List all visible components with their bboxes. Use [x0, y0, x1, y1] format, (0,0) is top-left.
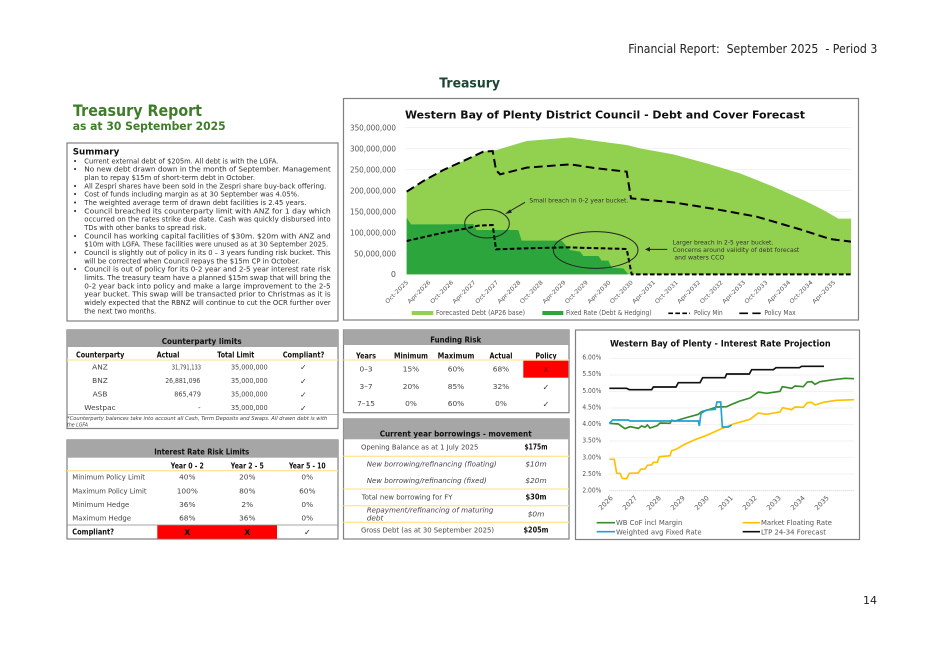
y axis gridlines and labels: 0	[391, 270, 396, 279]
page number: 14	[863, 594, 877, 607]
rows: New borrowing/refinancing (fixed)	[367, 476, 487, 485]
y axis gridlines and labels: 4.50%	[582, 403, 601, 411]
table title: Counterparty limits	[162, 337, 242, 346]
rows: Gross Debt (as at 30 September 2025)	[361, 526, 494, 535]
rows: 3–7	[359, 382, 373, 391]
summary bullet list: •	[73, 182, 77, 190]
summary bullet list: •	[73, 199, 77, 207]
panel: summary	[67, 143, 338, 321]
rows	[344, 443, 569, 535]
rows: 36%	[239, 514, 256, 523]
summary bullet list: $10m with LGFA. These facilities were unused as at 30 September 2025.	[84, 241, 328, 249]
chart legend	[597, 519, 832, 537]
x axis labels: Apr-2030	[587, 280, 613, 305]
summary bullet list: •	[73, 266, 77, 274]
line: policy max	[407, 151, 851, 242]
summary bullet list: 0-2 year back into policy and make a large improvement to the 2-5	[84, 282, 331, 290]
summary bullet list: the next two months.	[84, 307, 156, 315]
rows	[84, 362, 307, 413]
rows	[357, 361, 568, 409]
x axis labels: Apr-2028	[497, 280, 523, 305]
chart legend: Policy Max	[764, 309, 796, 317]
chart legend: WB CoF incl Margin	[616, 519, 682, 527]
rows: $0m	[528, 509, 544, 518]
summary bullet list: •	[73, 207, 77, 215]
rows: 20%	[403, 382, 419, 391]
compliance row: Compliant?	[72, 527, 114, 536]
rows: 35,000,000	[231, 390, 268, 399]
rows: 31,791,133	[172, 362, 201, 371]
rows: 0%	[301, 500, 313, 509]
summary bullet list: Council is slightly out of policy in its 0 – 3 years funding risk bucket. This	[84, 249, 331, 257]
y axis gridlines and labels	[350, 123, 852, 279]
x axis labels: 2028	[645, 494, 663, 512]
line: policy min	[407, 225, 851, 274]
y axis gridlines and labels: 6.00%	[582, 354, 601, 362]
summary bullet list: TDs with other banks to spread risk.	[83, 224, 206, 232]
rows: 0%	[301, 514, 313, 523]
y axis gridlines and labels: 50,000,000	[354, 249, 396, 258]
x axis labels: 2026	[597, 494, 615, 512]
table title: Funding Risk	[430, 335, 482, 344]
rows: 15%	[403, 364, 419, 373]
chart legend	[412, 309, 796, 317]
x axis labels: 2033	[765, 494, 783, 512]
x axis labels: Apr-2034	[767, 280, 792, 305]
summary bullet list: Council has working capital facilities of $30m. $20m with ANZ and	[84, 232, 331, 240]
summary bullet list: will be corrected when Council repays the $15m CP in October.	[84, 257, 300, 265]
rows: X	[543, 365, 549, 374]
callout: larger breach: Concerns around validity of debt forecast	[673, 247, 800, 254]
rows: 68%	[179, 514, 196, 523]
rows: debt	[367, 513, 384, 522]
summary bullet list: All Zespri shares have been sold in the Zespri share buy-back offering.	[84, 182, 326, 190]
rows: ASB	[93, 390, 107, 399]
rows: Minimum Hedge	[72, 500, 130, 509]
column headers: Counterparty	[76, 351, 125, 360]
rows: Total new borrowing for FY	[361, 493, 453, 502]
x axis labels: Apr-2027	[452, 280, 478, 305]
column headers: Year 0 - 2	[170, 461, 204, 470]
compliance row: X	[184, 528, 191, 537]
rows: $205m	[524, 526, 548, 535]
summary bullet list: •	[73, 232, 77, 240]
rows: 68%	[493, 364, 509, 373]
column headers: Total Limit	[217, 351, 254, 360]
rows: ✓	[543, 383, 549, 392]
rows: 100%	[177, 486, 198, 495]
callout: larger breach	[553, 232, 800, 268]
y axis gridlines and labels: 250,000,000	[350, 165, 396, 174]
report title	[73, 101, 226, 133]
line: LTP forecast	[609, 366, 824, 390]
callout: small breach	[465, 197, 628, 238]
y axis gridlines and labels: 2.50%	[582, 470, 601, 478]
summary bullet list: •	[73, 249, 77, 257]
x axis labels: Apr-2035	[812, 280, 837, 305]
compliance row: X	[244, 528, 251, 537]
line: market floating rate	[609, 400, 854, 479]
x axis labels: Oct-2030	[609, 280, 635, 305]
rows: 35,000,000	[231, 362, 268, 371]
footnote: *Counterparty balances take into account all Cash, Term Deposits and Swaps. All drawn debt is with	[67, 416, 328, 422]
rows: Opening Balance as at 1 July 2025	[361, 443, 479, 452]
x axis labels: Oct-2028	[519, 280, 545, 305]
rows: 60%	[299, 486, 316, 495]
summary bullet list: No new debt drawn down in the month of September. Management	[84, 166, 331, 174]
summary bullet list: plan to repay $15m of short-term debt in October.	[84, 174, 255, 182]
column headers: Minimum	[394, 351, 428, 360]
report title: Treasury Report	[73, 101, 202, 120]
callout: larger breach: Larger breach in 2-5 year bucket.	[673, 240, 773, 247]
x axis labels	[385, 280, 837, 305]
y axis gridlines and labels	[582, 354, 854, 494]
y axis gridlines and labels: 3.50%	[582, 437, 601, 445]
rows: 40%	[179, 473, 196, 482]
table: counterparty limits	[67, 330, 338, 428]
y axis gridlines and labels: 150,000,000	[350, 207, 396, 216]
rows: 85%	[448, 382, 464, 391]
line: weighted avg fixed rate	[609, 402, 732, 427]
table: current year borrowings	[344, 419, 569, 539]
footnote: the LGFA	[67, 422, 88, 428]
rows: $20m	[525, 476, 547, 485]
x axis labels: 2029	[669, 494, 687, 512]
y axis gridlines and labels: 3.00%	[582, 453, 601, 461]
column headers	[170, 461, 326, 470]
summary heading: Summary	[73, 147, 119, 157]
x axis labels: 2030	[693, 494, 711, 512]
rows: Maximum Hedge	[72, 514, 131, 523]
table: interest rate risk limits	[67, 440, 338, 539]
rows: 2%	[241, 500, 253, 509]
chart title: Western Bay of Plenty - Interest Rate Projection	[610, 339, 831, 349]
x axis labels: Oct-2034	[789, 280, 815, 305]
rows: ANZ	[92, 362, 108, 371]
rows: $30m	[526, 493, 546, 502]
column headers: Maximum	[438, 351, 474, 360]
column headers: Compliant?	[283, 351, 325, 360]
rows: 20%	[239, 473, 256, 482]
rows: 26,881,096	[165, 376, 201, 385]
callout: larger breach: and waters CCO	[674, 255, 724, 262]
column headers	[76, 351, 325, 360]
chart legend: Market Floating Rate	[761, 519, 832, 527]
x axis labels: Oct-2025	[385, 280, 410, 305]
line: WB CoF incl margin	[609, 378, 854, 429]
rows: BNZ	[92, 376, 108, 385]
panel: debt and cover forecast chart	[344, 98, 858, 320]
rows: ✓	[300, 377, 307, 386]
callout: small breach: Small breach in 0-2 year bucket.	[529, 197, 628, 204]
chart legend: LTP 24-34 Forecast	[761, 529, 826, 537]
rows: 60%	[448, 399, 464, 408]
rows: New borrowing/refinancing (floating)	[367, 460, 497, 469]
x axis labels: 2034	[789, 494, 807, 512]
compliance row	[67, 525, 338, 539]
rows: -	[198, 403, 201, 412]
x axis labels: Oct-2033	[744, 280, 770, 305]
column headers: Year 5 - 10	[288, 461, 326, 470]
chart title: Western Bay of Plenty District Council - Debt and Cover Forecast	[405, 108, 805, 121]
x axis labels: 2027	[621, 494, 639, 512]
report title: as at 30 September 2025	[73, 119, 226, 133]
y axis gridlines and labels: 5.50%	[582, 370, 601, 378]
rows: 32%	[493, 382, 509, 391]
x axis labels: Oct-2032	[699, 280, 725, 305]
column headers: Years	[355, 351, 376, 360]
rows: 35,000,000	[231, 376, 268, 385]
rows: $175m	[524, 443, 548, 452]
x axis labels: Apr-2033	[722, 280, 747, 305]
summary bullet list: Council is out of policy for its 0-2 year and 2-5 year interest rate risk	[84, 266, 332, 274]
rows: ✓	[543, 400, 549, 409]
area: fixed rate	[407, 218, 628, 274]
summary bullet list: limits. The treasury team have a planned $15m swap that will bring the	[84, 274, 331, 282]
y axis gridlines and labels: 100,000,000	[350, 228, 396, 237]
x axis labels: 2031	[717, 494, 735, 512]
rows: 0%	[405, 399, 417, 408]
y axis gridlines and labels: 200,000,000	[350, 186, 396, 195]
summary bullet list: Council breached its counterparty limit with ANZ for 1 day which	[84, 207, 331, 215]
x axis labels	[597, 494, 831, 512]
x axis labels: Oct-2031	[654, 280, 680, 305]
table title: Current year borrowings - movement	[380, 430, 532, 439]
x axis labels: Apr-2032	[677, 280, 702, 305]
column headers: Actual	[157, 351, 180, 360]
rows: ✓	[300, 404, 307, 413]
x axis labels: Oct-2027	[475, 280, 500, 305]
chart legend: Fixed Rate (Debt & Hedging)	[566, 309, 652, 317]
y axis gridlines and labels: 2.00%	[582, 486, 601, 494]
x axis labels: Apr-2026	[407, 280, 433, 305]
panel: interest rate projection chart	[576, 330, 860, 540]
x axis labels: Oct-2029	[564, 280, 590, 305]
footnote	[67, 416, 328, 428]
section heading: Treasury: Treasury	[439, 75, 500, 91]
rows: ✓	[300, 363, 307, 372]
page header: Financial Report: September 2025 - Period 3	[628, 42, 877, 56]
x axis labels: Oct-2026	[430, 280, 455, 305]
y axis gridlines and labels: 300,000,000	[350, 144, 396, 153]
summary bullet list: occurred on the rates strike due date. Cash was quickly disbursed into	[84, 216, 331, 224]
y axis gridlines and labels: 4.00%	[582, 420, 601, 428]
rows: Minimum Policy Limit	[72, 473, 145, 482]
rows: 865,479	[174, 390, 201, 399]
summary bullet list: •	[73, 166, 77, 174]
column headers: Actual	[490, 351, 513, 360]
table title: Interest Rate Risk Limits	[154, 447, 249, 456]
summary bullet list: •	[73, 157, 77, 165]
rows: 7–15	[357, 399, 375, 408]
rows: 80%	[239, 486, 256, 495]
rows: $10m	[525, 460, 547, 469]
area: forecasted debt	[407, 137, 851, 274]
chart legend: Policy Min	[694, 309, 723, 317]
summary bullet list: Cost of funds including margin as at 30 September was 4.05%.	[84, 191, 299, 199]
rows: 0–3	[359, 364, 373, 373]
x axis labels: Apr-2029	[542, 280, 568, 305]
rows: 0%	[495, 399, 507, 408]
rows: 35,000,000	[231, 403, 268, 412]
summary bullet list: widely expected that the RBNZ will continue to cut the OCR further over	[84, 299, 331, 307]
rows: Maximum Policy Limit	[72, 486, 147, 495]
summary bullet list: The weighted average term of drawn debt facilities is 2.45 years.	[83, 199, 306, 207]
summary bullet list: •	[73, 191, 77, 199]
y axis gridlines and labels: 5.00%	[582, 387, 601, 395]
x axis labels: Apr-2031	[632, 280, 657, 305]
summary bullet list	[73, 157, 332, 315]
chart legend: Forecasted Debt (AP26 base)	[436, 309, 525, 317]
column headers	[355, 351, 557, 360]
rows	[72, 473, 316, 523]
rows: Westpac	[84, 403, 116, 412]
y axis gridlines and labels: 350,000,000	[350, 123, 396, 132]
column headers: Year 2 - 5	[230, 461, 264, 470]
column headers: Policy	[535, 351, 557, 360]
rows: 0%	[301, 473, 313, 482]
chart legend: Weighted avg Fixed Rate	[616, 529, 702, 537]
rows: Repayment/refinancing of maturing	[367, 505, 494, 514]
rows: 36%	[179, 500, 196, 509]
rows: ✓	[300, 390, 307, 400]
table: funding risk	[344, 330, 569, 413]
summary bullet list: year bucket. This swap will be transacted prior to Christmas as it is	[84, 291, 331, 299]
x axis labels: 2032	[741, 494, 759, 512]
compliance row: ✓	[304, 528, 311, 537]
summary bullet list: Current external debt of $205m. All debt is with the LGFA.	[84, 157, 278, 165]
x axis labels: 2035	[813, 494, 831, 512]
rows: 60%	[448, 364, 464, 373]
